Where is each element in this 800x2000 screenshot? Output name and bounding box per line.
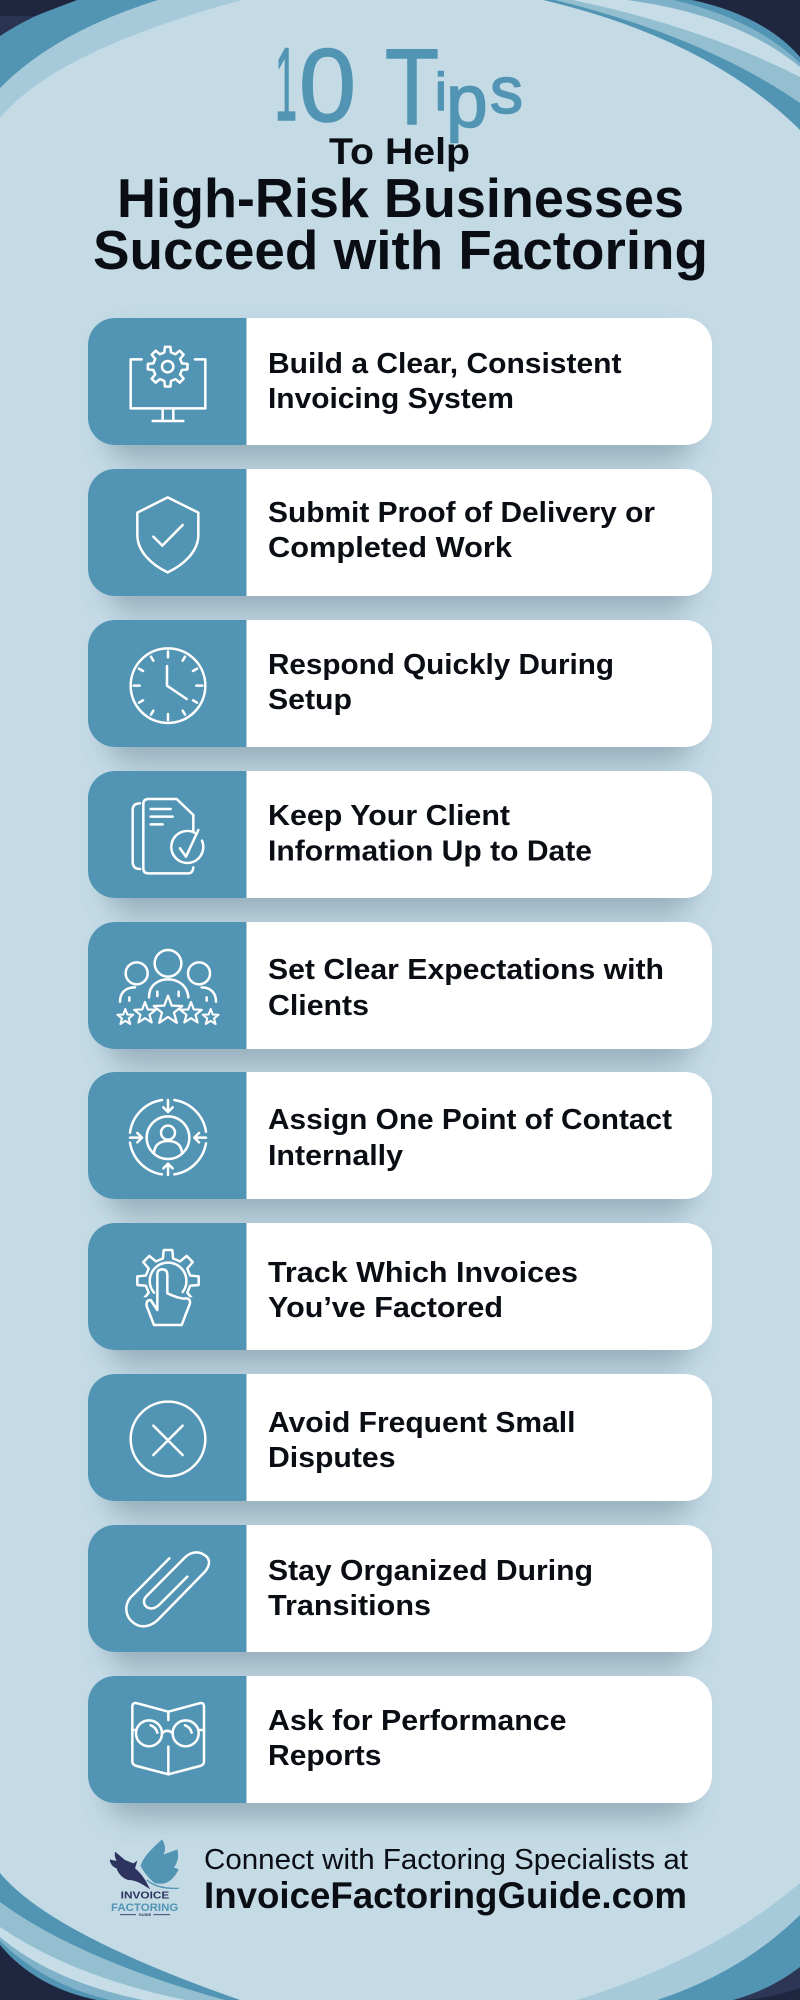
footer text: InvoiceFactoringGuide.com	[204, 1875, 687, 1916]
title script: 10 Tips	[275, 26, 523, 147]
tip text	[268, 1257, 578, 1324]
logo wordmark: INVOICE	[121, 1890, 170, 1901]
icon: circled X	[131, 1402, 205, 1476]
panel: tip 5	[88, 922, 712, 1049]
logo bird: left wing	[110, 1852, 150, 1889]
tip text: Internally	[268, 1140, 403, 1172]
tip text: Transitions	[268, 1590, 431, 1622]
tip text: Stay Organized During	[268, 1555, 593, 1587]
tip text: Disputes	[268, 1442, 396, 1474]
title script: 10 Tips: 1	[275, 27, 297, 143]
footer logo	[110, 1839, 179, 1917]
bottom-right corner bands	[577, 1883, 800, 2000]
panel: tip 10	[88, 1676, 712, 1803]
icon: team with stars	[117, 950, 219, 1024]
panel: tip 4	[88, 771, 712, 898]
panel: tip 9	[88, 1525, 712, 1652]
top-left corner bands	[0, 0, 242, 118]
title: Succeed with Factoring	[93, 219, 708, 281]
icon: hand tapping gear	[137, 1250, 199, 1327]
panel: tip 1	[88, 318, 712, 445]
title	[93, 26, 708, 281]
tip text: Track Which Invoices	[268, 1257, 578, 1289]
tip text	[268, 1104, 672, 1172]
tip text: Respond Quickly During	[268, 649, 614, 681]
tip text: Reports	[268, 1740, 382, 1772]
logo bird: right wing	[141, 1839, 179, 1884]
bottom-left corner bands	[0, 1873, 240, 2000]
tip text: Assign One Point of Contact	[268, 1104, 672, 1136]
tip text	[268, 649, 614, 716]
panel: tip 7	[88, 1223, 712, 1350]
top-right corner bands	[543, 0, 800, 130]
icon: book with glasses	[132, 1703, 204, 1774]
tip text: Submit Proof of Delivery or	[268, 497, 655, 529]
panel: tip 2	[88, 469, 712, 596]
tip text: Invoicing System	[268, 383, 514, 415]
tip text: Information Up to Date	[268, 836, 592, 868]
tip text: You’ve Factored	[268, 1292, 503, 1324]
footer text: Connect with Factoring Specialists at	[204, 1844, 688, 1876]
logo bird: swoosh	[147, 1880, 179, 1888]
title script: 10 Tips: i	[435, 63, 447, 122]
footer text	[204, 1844, 688, 1916]
title script: 10 Tips: T	[385, 26, 439, 147]
tip text: Set Clear Expectations with	[268, 954, 664, 986]
title script: 10 Tips: 0	[299, 28, 356, 144]
subtitle: To Help: To Help	[329, 131, 470, 172]
icon: paperclip	[126, 1552, 209, 1626]
tip text: Completed Work	[268, 532, 513, 564]
tip text	[268, 800, 592, 868]
tip text: Ask for Performance	[268, 1705, 566, 1737]
headline: High-Risk Businesses	[117, 167, 684, 229]
tip text	[268, 1555, 593, 1622]
tip text: Avoid Frequent Small	[268, 1407, 576, 1439]
tip text	[268, 348, 622, 415]
icon: monitor with gear	[131, 347, 205, 421]
tip text	[268, 1705, 566, 1772]
card shadows	[106, 318, 694, 1803]
tip text: Setup	[268, 684, 352, 716]
icon: document check	[133, 799, 203, 873]
icon: shield check	[137, 497, 198, 572]
panel: tip 6	[88, 1072, 712, 1199]
footer logo: GUIDE	[139, 1913, 152, 1917]
icon: contact person with arrows	[130, 1100, 206, 1175]
tip text	[268, 954, 664, 1022]
icon: clock	[131, 648, 205, 723]
tip text: Build a Clear, Consistent	[268, 348, 622, 380]
tip text	[268, 1407, 576, 1474]
tip text: Clients	[268, 990, 369, 1022]
panel: tip 3	[88, 620, 712, 747]
tip text	[268, 497, 655, 564]
tip text: Keep Your Client	[268, 800, 510, 832]
title script: 10 Tips: p	[446, 59, 488, 143]
footer logo: FACTORING	[111, 1902, 179, 1914]
title script: 10 Tips: s	[490, 53, 523, 127]
panel: tip 8	[88, 1374, 712, 1501]
